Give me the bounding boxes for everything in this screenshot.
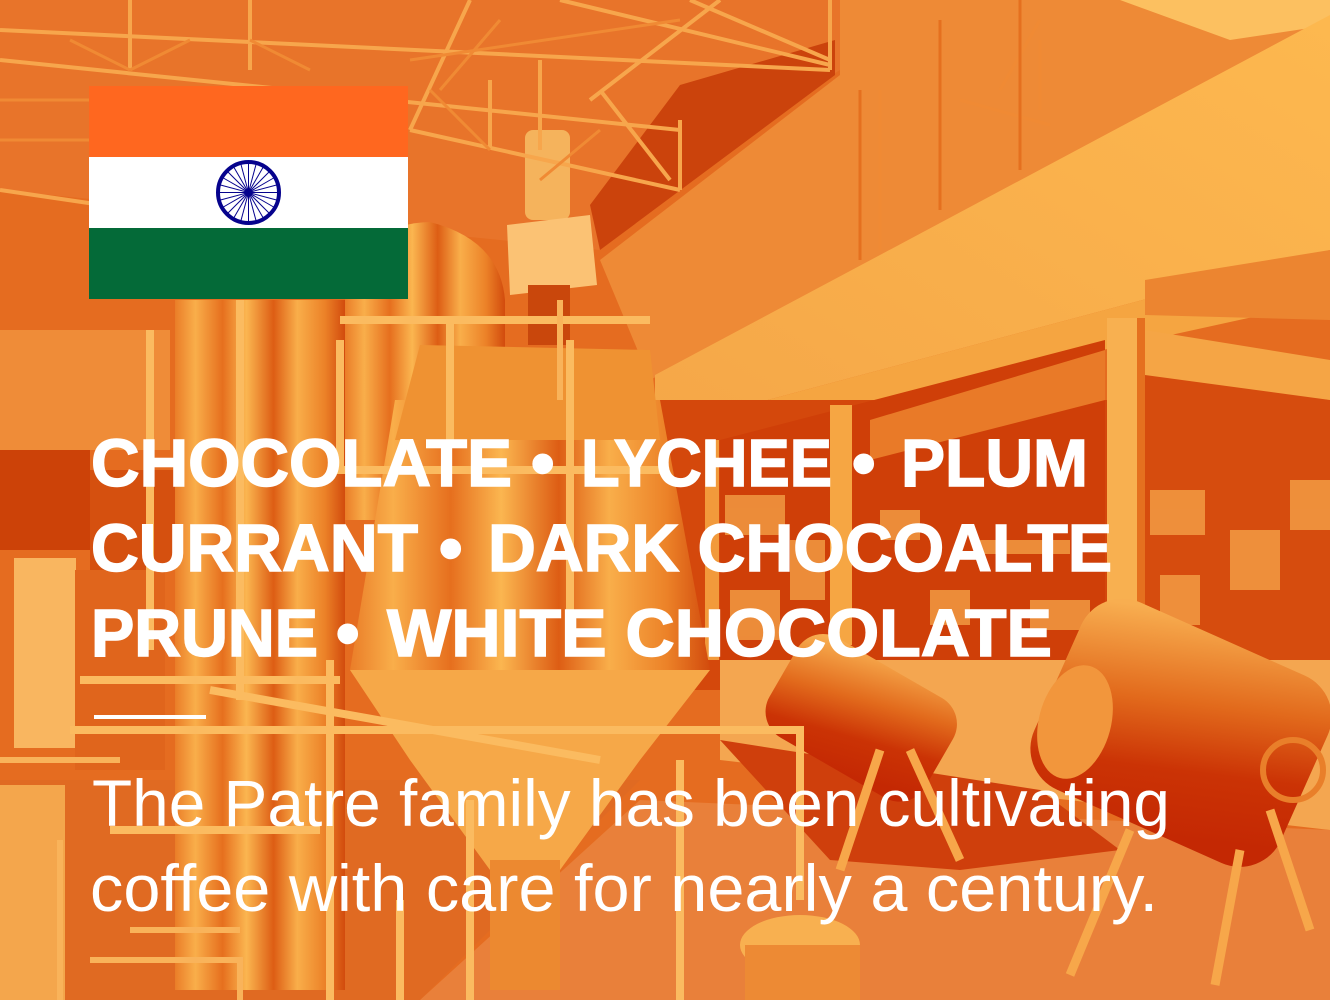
heading: tasting notes: PLUM (901, 426, 1088, 501)
heading: tasting notes: • (852, 426, 875, 501)
window foliage patches (725, 480, 1330, 640)
flag: white band (89, 157, 408, 228)
heading: tasting notes (91, 426, 1112, 671)
flag: Ashoka Chakra (218, 162, 279, 223)
trusses (0, 0, 830, 215)
lower right room (660, 400, 1330, 690)
main vessels (175, 300, 345, 990)
low wall & floor (720, 660, 1330, 830)
heading: tasting notes: PRUNE (91, 596, 318, 671)
divider rule (94, 715, 206, 719)
left wall (0, 330, 170, 450)
flag of India (89, 86, 408, 299)
columns (1107, 318, 1137, 638)
floor shadow (720, 740, 1120, 870)
heading: tasting notes: DARK CHOCOALTE (488, 511, 1112, 586)
heading: tasting notes: CHOCOLATE (91, 426, 512, 501)
motor (525, 130, 570, 220)
heading: tasting notes: CURRANT (91, 511, 418, 586)
heading: tasting notes: LYCHEE (581, 426, 832, 501)
description text (90, 766, 1170, 925)
ceiling left (0, 0, 840, 250)
flag: saffron band (89, 86, 408, 157)
flag: green band (89, 228, 408, 299)
beam (655, 15, 1330, 430)
heading: tasting notes: • (336, 596, 359, 671)
description text: The Patre family has been cultivating (92, 766, 1170, 840)
drums (1016, 584, 1330, 881)
vessel bottom ring (740, 915, 860, 975)
pipes (70, 300, 800, 1000)
description text: coffee with care for nearly a century. (90, 851, 1158, 925)
heading: tasting notes: • (439, 511, 462, 586)
heading: tasting notes: • (531, 426, 554, 501)
heading: tasting notes: WHITE CHOCOLATE (387, 596, 1052, 671)
